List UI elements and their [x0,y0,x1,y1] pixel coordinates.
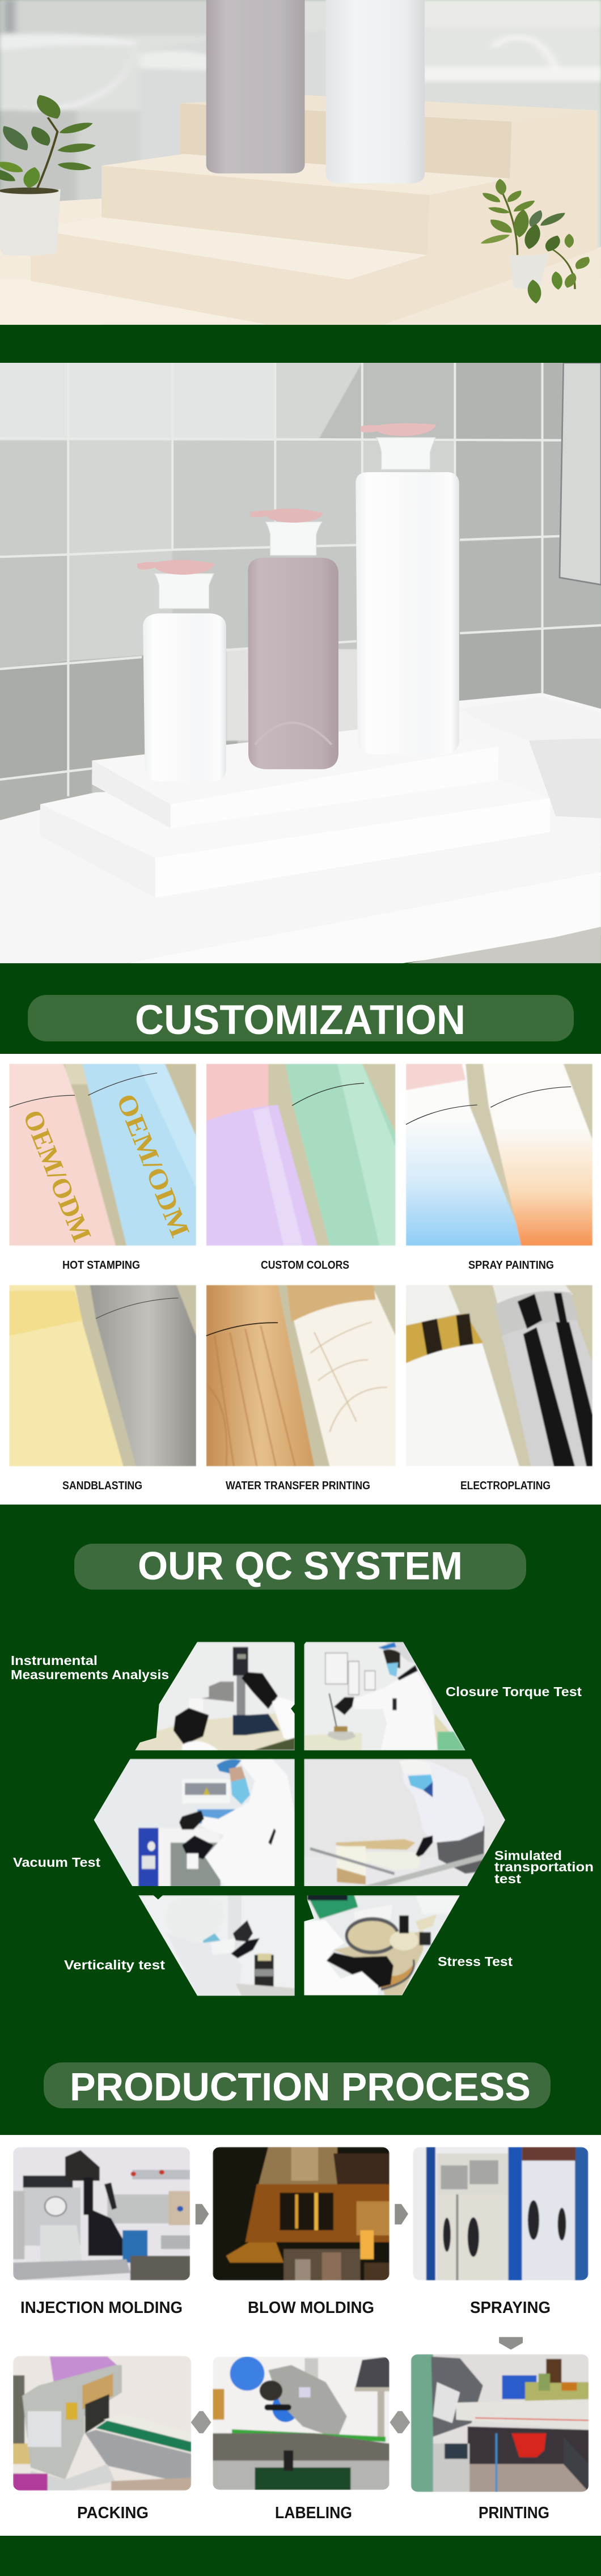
pill [28,995,574,1041]
sandblasting bottles [9,1285,196,1467]
white background [0,2135,601,2536]
tall white bottle [355,423,459,755]
QC label: test [494,1871,521,1886]
QC label: Simulated [494,1848,562,1863]
QC label: Verticality test [64,1958,165,1972]
double arrow [191,2411,211,2433]
heading: OUR QC SYSTEM [138,1544,463,1588]
label: LABELING [275,2504,352,2522]
water transfer printing bottles [206,1285,396,1467]
double arrow [390,2411,410,2433]
photo: packing [13,2356,191,2490]
QC photo: stress test [304,1895,460,1997]
process photos and arrows [13,2147,589,2492]
QC photo: simulated transportation test [304,1759,506,1888]
label: SPRAY PAINTING [468,1259,554,1272]
gold text right: OEM/ODM [111,1090,195,1242]
QC label: Stress Test [438,1954,513,1969]
white stepped tray [40,730,550,810]
QC label: Closure Torque Test [446,1684,582,1699]
heading: CUSTOMIZATION [135,997,465,1043]
hot stamping bottles [9,1064,196,1246]
sink counter [0,693,601,963]
photo: bottle bases on cream steps [0,0,601,327]
tiled wall [0,359,601,848]
pill [74,1544,526,1590]
electroplating bottles [406,1285,592,1467]
heading: PRODUCTION PROCESS [70,2065,531,2109]
small white bottle [137,560,226,782]
label: SANDBLASTING [62,1480,142,1492]
photo: three bottles on white steps [0,359,601,963]
label: INJECTION MOLDING [20,2299,183,2317]
QC label [11,1653,169,1682]
custom colors bottles [206,1064,396,1246]
QC label: Vacuum Test [13,1855,100,1870]
white bottle [326,0,425,183]
section header: production process [44,2062,551,2109]
grey bottle [206,0,304,173]
QC label: Instrumental [11,1653,98,1668]
white background [0,1054,601,1505]
hexagon photo grid: left column [92,1642,295,1997]
photo: spraying [413,2147,589,2281]
label: WATER TRANSFER PRINTING [226,1480,370,1492]
countertop [0,198,101,325]
section header: customization [28,995,574,1043]
blurred bathroom background [0,0,601,327]
panel: production process [0,2135,601,2536]
QC photo: vacuum test [92,1759,295,1888]
QC photo: closure torque test [304,1642,466,1752]
label: CUSTOM COLORS [261,1259,349,1272]
arrow down [499,2337,523,2350]
swatch images [9,1064,592,1467]
photo: printing [411,2354,589,2492]
label: PACKING [77,2504,149,2522]
left potted plant [0,92,97,256]
steps [31,95,597,325]
spray painting bottles [406,1064,592,1246]
mauve bottle [248,509,338,769]
label: HOT STAMPING [62,1259,140,1272]
QC photo: verticality test [138,1895,295,1997]
label: PRINTING [479,2504,549,2522]
QC label: transportation [494,1859,594,1874]
panel: customization options [0,1054,601,1505]
pill [44,2062,551,2108]
arrow [395,2204,408,2225]
QC photo: instrumental measurements [134,1642,295,1752]
photo: labeling [213,2357,390,2490]
label: SPRAYING [470,2299,551,2317]
QC label: Measurements Analysis [11,1667,169,1682]
hexagon photo grid: right column [304,1642,506,1997]
QC label [494,1848,594,1886]
label: ELECTROPLATING [460,1480,551,1492]
photo: injection molding [13,2147,190,2281]
section header: QC system [74,1544,526,1590]
gold text left: OEM/ODM [17,1106,97,1246]
label: BLOW MOLDING [248,2299,374,2317]
photo: blow molding [213,2147,390,2281]
right potted plant [479,179,594,304]
arrow [196,2204,209,2225]
mirror [560,363,601,584]
